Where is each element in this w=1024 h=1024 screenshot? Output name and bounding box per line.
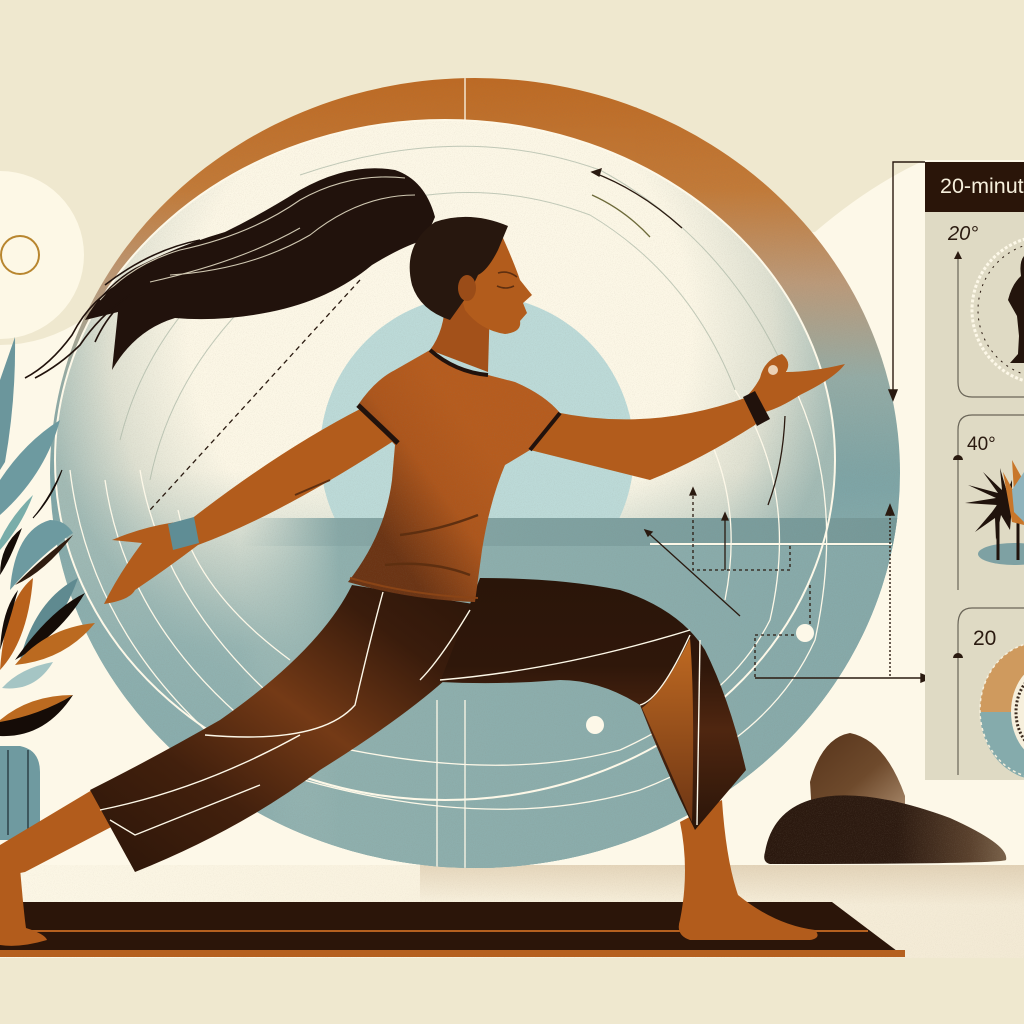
- marker dots: [586, 624, 814, 734]
- card: 20: 20: [973, 627, 996, 650]
- concentric circle diagram: [30, 70, 910, 880]
- card: 40 degrees: [953, 415, 1024, 590]
- neck: [430, 300, 490, 372]
- shirt: [345, 345, 565, 605]
- left sun disc: [0, 171, 84, 339]
- trouser inner fold: [642, 638, 693, 822]
- card: 20: [953, 608, 1024, 780]
- rocks: [760, 733, 1010, 865]
- panel header: [925, 162, 1024, 212]
- plant pot: [0, 746, 40, 840]
- card: 20 degrees: 20°: [947, 223, 978, 245]
- plant leaves: [0, 337, 95, 736]
- trousers: [90, 578, 746, 872]
- card: 40 degrees: 40°: [967, 434, 996, 455]
- legs and feet: [0, 790, 818, 946]
- annotation arrows: [150, 169, 810, 678]
- back arm and hand: [104, 408, 395, 604]
- connector lines to panel: [755, 162, 931, 682]
- card: 20 degrees: [947, 223, 1024, 397]
- ponytail: [25, 168, 435, 378]
- figure: [0, 168, 845, 946]
- floor: [0, 865, 1024, 958]
- face: [455, 225, 532, 334]
- right info panel: [925, 162, 1024, 780]
- panel header: 20-minut: [940, 174, 1024, 198]
- yoga mat: [0, 902, 905, 957]
- hair and ear: [410, 217, 508, 320]
- front arm and hand: [530, 354, 845, 480]
- plant: [0, 337, 95, 840]
